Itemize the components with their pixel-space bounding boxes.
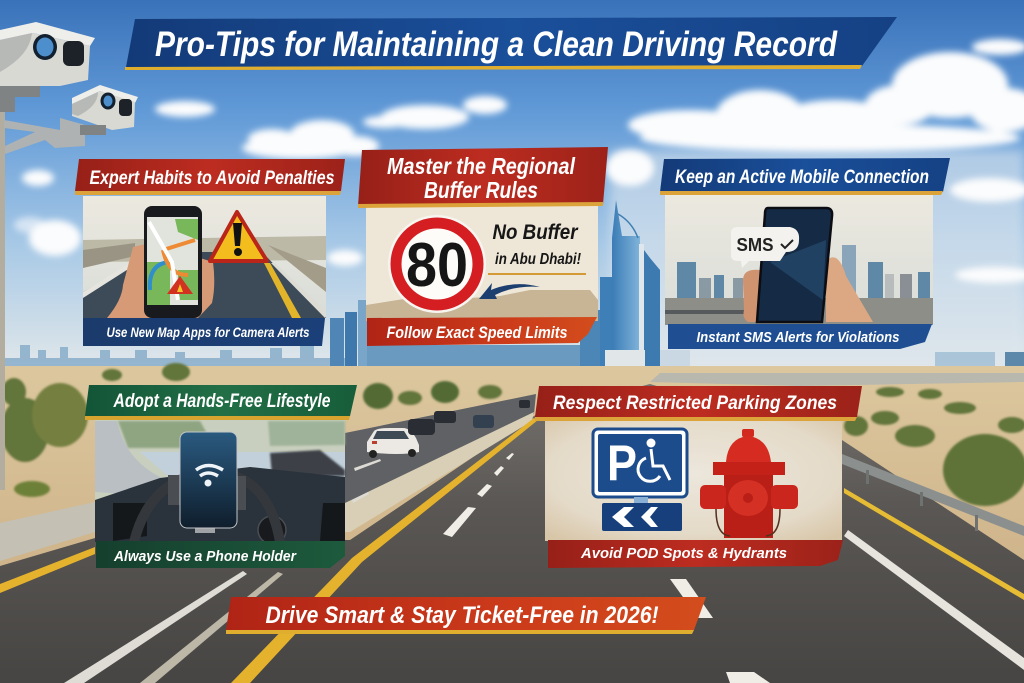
panel caption (668, 324, 932, 349)
no buffer note (488, 221, 586, 275)
arrow (479, 283, 540, 299)
panel: mobile connection (660, 158, 950, 349)
dashboard (95, 467, 345, 542)
panel heading (85, 385, 357, 420)
hand (743, 270, 760, 322)
panel caption: Instant SMS Alerts for Violations (696, 329, 900, 346)
parking sign (593, 429, 687, 531)
central concrete barrier (345, 412, 534, 532)
title banner: Pro-Tips for Maintaining a Clean Driving Record (155, 25, 838, 64)
panel: expert habits (75, 159, 345, 346)
panel caption (367, 317, 597, 346)
city skyline (0, 200, 1024, 368)
opposing lane road (345, 394, 536, 505)
footer banner (226, 597, 706, 634)
panel heading: Expert Habits to Avoid Penalties (90, 168, 334, 189)
panel heading (535, 386, 862, 421)
phone with map (144, 206, 202, 318)
panel: hands-free (85, 385, 357, 568)
hand (107, 244, 214, 318)
icon: wifi (196, 466, 223, 486)
parking sign: P (607, 435, 637, 491)
panel heading: Master the Regional (387, 153, 576, 179)
right guard rail (842, 454, 1024, 536)
panel caption: Avoid POD Spots & Hydrants (580, 545, 787, 562)
panel heading: Respect Restricted Parking Zones (553, 393, 837, 414)
clouds (14, 39, 1024, 283)
panel heading (75, 159, 345, 195)
distant flyover (650, 373, 1024, 386)
speed limit sign: 80 (406, 231, 468, 300)
icon: fire hydrant (700, 429, 798, 538)
phone (180, 432, 237, 528)
no buffer note: No Buffer (492, 221, 579, 244)
white car (367, 428, 419, 458)
panel heading (358, 147, 608, 208)
sky background (0, 0, 1024, 372)
panel caption: Follow Exact Speed Limits (386, 323, 568, 342)
panel heading: Buffer Rules (424, 177, 538, 203)
panel caption (83, 318, 325, 346)
panel caption: Use New Map Apps for Camera Alerts (106, 324, 310, 340)
pale haze on the right of the sky (610, 150, 1024, 370)
panel image: 80 speed sign (366, 205, 598, 321)
phone (757, 208, 832, 322)
desert ground (0, 366, 1024, 683)
footer banner: Drive Smart & Stay Ticket-Free in 2026! (266, 602, 658, 629)
panel image: car interior with phone holder (95, 420, 345, 544)
road markings (0, 418, 1024, 683)
panel image: parking sign and hydrant (545, 419, 842, 541)
panel heading: Adopt a Hands-Free Lifestyle (113, 391, 331, 412)
title banner (125, 17, 897, 70)
panel caption (548, 540, 843, 568)
panel image: phone with SMS (665, 195, 933, 325)
camera pole (0, 105, 5, 490)
a-pillar (95, 421, 162, 494)
panel image: map app and warning sign (83, 196, 326, 320)
panel heading (660, 158, 950, 195)
panel caption: Always Use a Phone Holder (113, 548, 297, 565)
icon: warning triangle (210, 212, 267, 261)
phone holder (168, 475, 246, 510)
scrub vegetation (1, 363, 1024, 506)
left shoulder concrete barrier (0, 502, 95, 561)
panel caption (96, 541, 345, 568)
main road (0, 384, 1024, 683)
panel: regional buffer rules (358, 147, 608, 346)
sms bubble (731, 227, 799, 268)
panel heading: Keep an Active Mobile Connection (675, 167, 929, 188)
icon: speed cameras (0, 22, 138, 154)
steering wheel (134, 472, 280, 542)
sms bubble: SMS (736, 235, 774, 255)
panel: restricted parking (535, 386, 862, 568)
distant cars (408, 400, 530, 435)
speed limit sign (388, 215, 486, 313)
no buffer note: in Abu Dhabi! (495, 251, 582, 268)
